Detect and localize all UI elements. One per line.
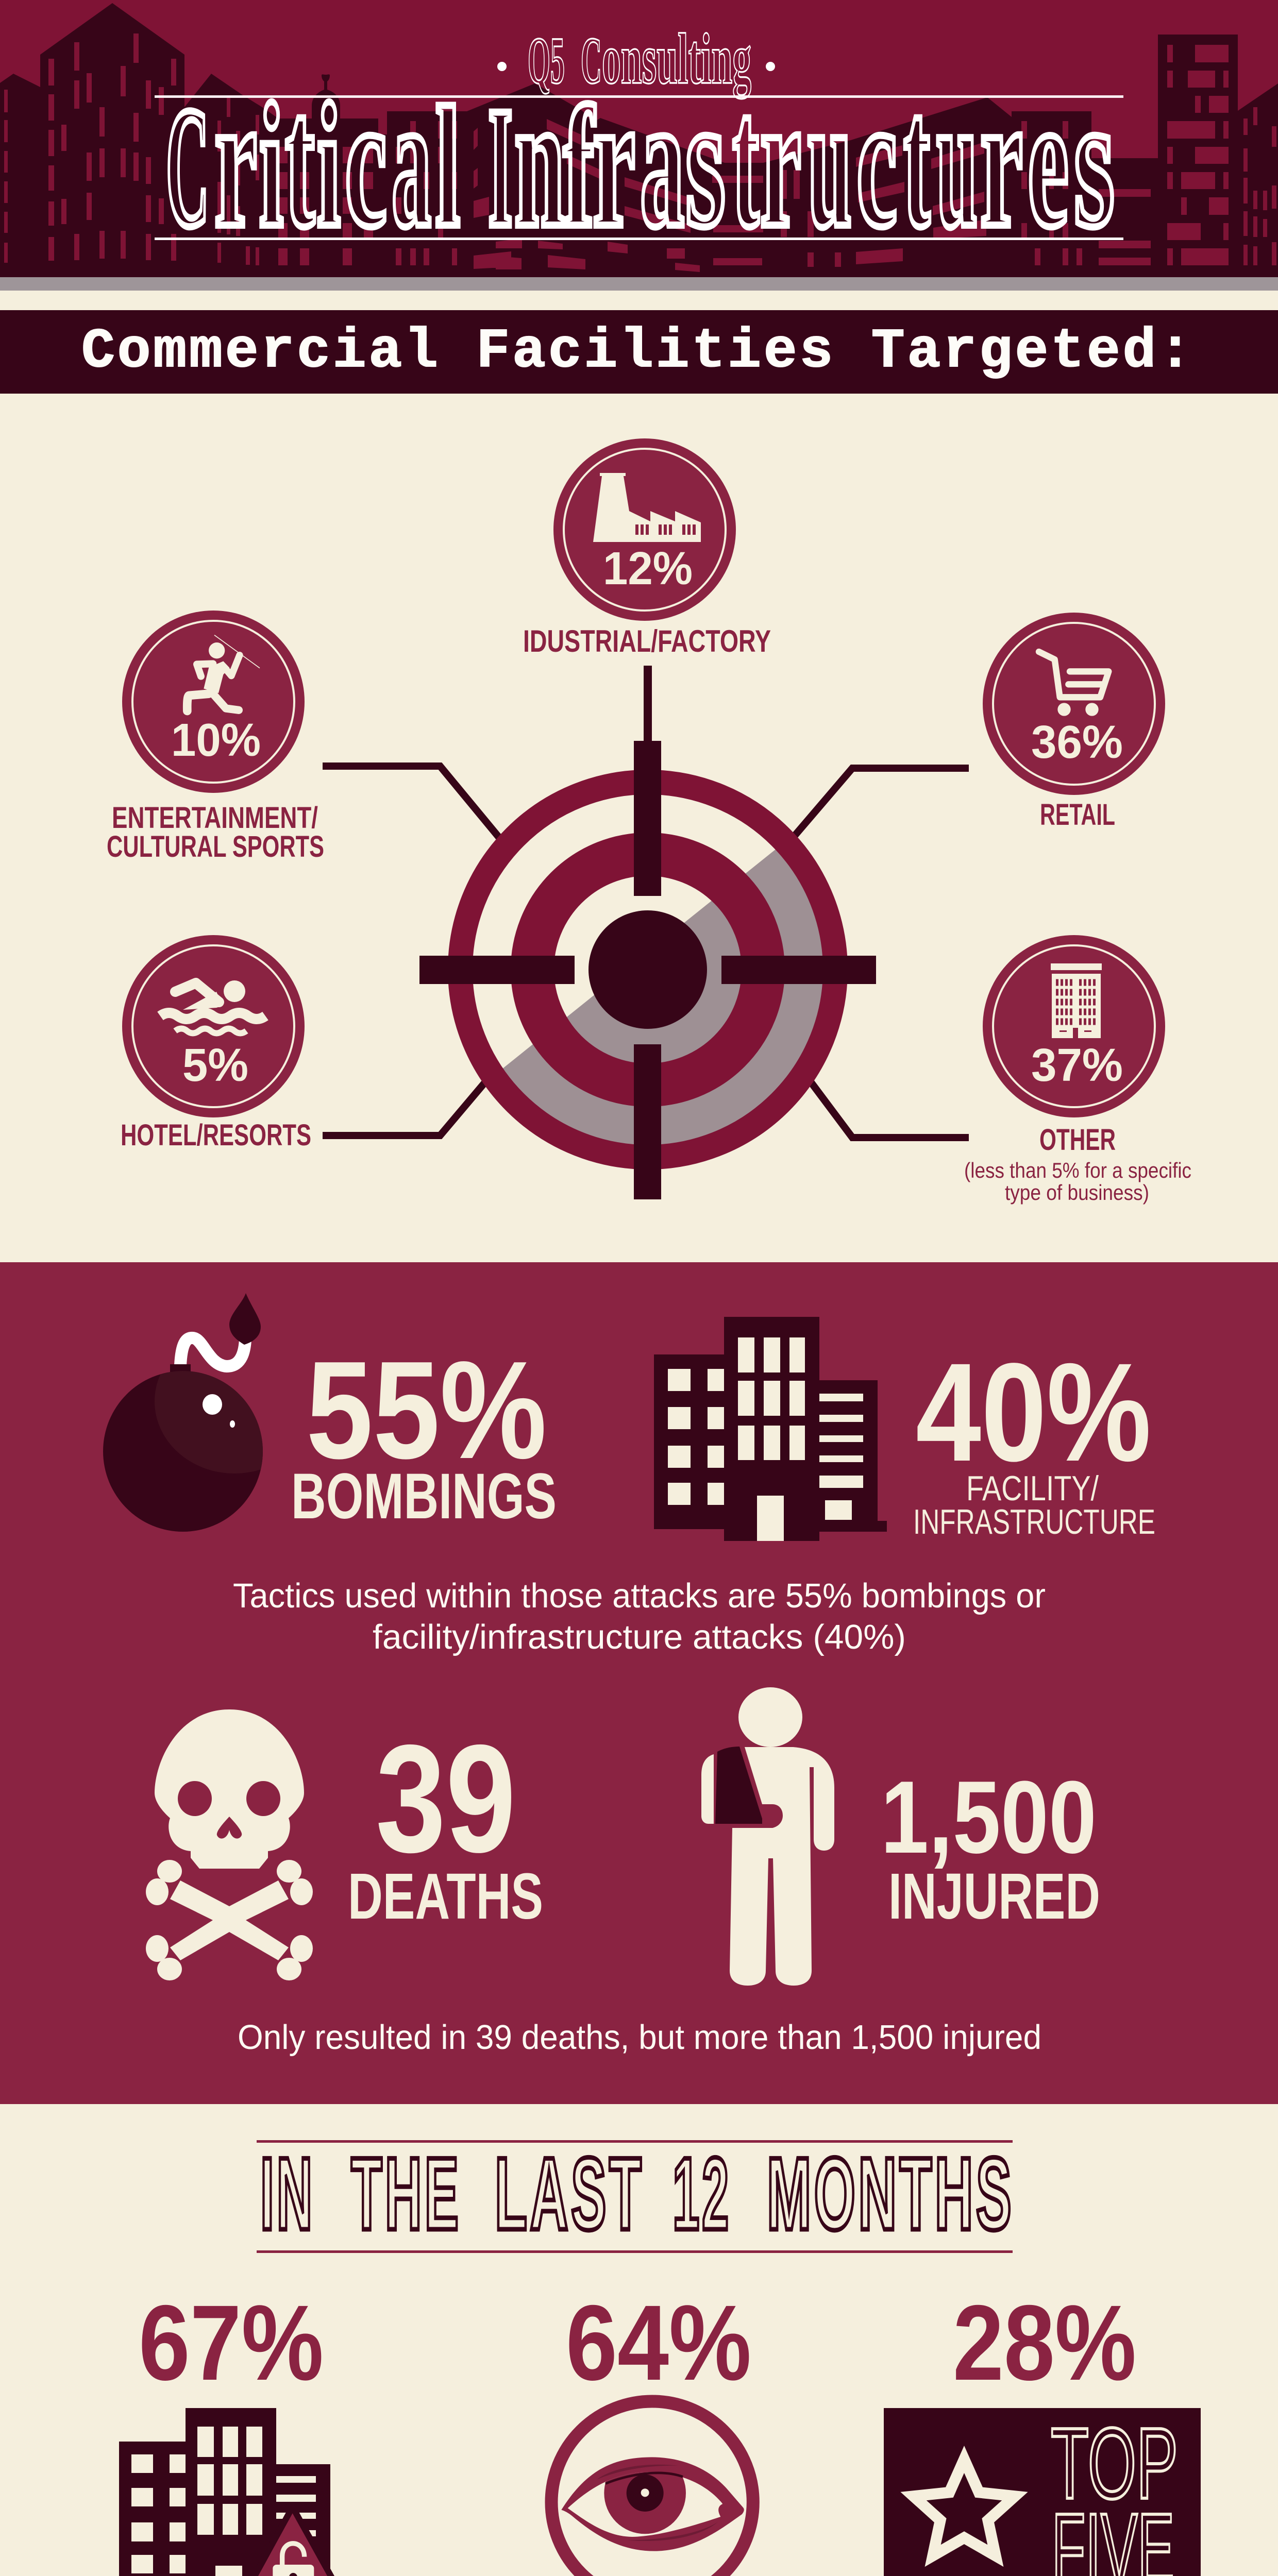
company name: onsulting	[602, 19, 751, 99]
icon: swimmer	[160, 980, 265, 1033]
bullseye	[588, 910, 707, 1029]
icon: office tower	[1051, 963, 1102, 1038]
panel: entertainment 10%	[122, 611, 305, 793]
bullet right	[766, 62, 775, 71]
city skyline illustration	[0, 3, 1278, 277]
company name: Q5	[528, 24, 565, 98]
label: industrial: IDUSTRIAL/FACTORY	[523, 624, 771, 658]
description: tactics: Tactics used within those attacks are 55% bombings or	[233, 1577, 1046, 1615]
column: 67% breach	[83, 2283, 380, 2576]
value: 5%	[182, 1040, 248, 1091]
target diagram	[323, 666, 969, 1236]
stat label: facility: FACILITY/	[966, 1469, 1099, 1508]
panel: industrial factory 12%	[553, 438, 736, 621]
grey divider band	[0, 277, 1278, 291]
icon: bomb	[103, 1293, 263, 1532]
main title: s	[1074, 56, 1115, 267]
icon: eye in circle	[551, 2401, 753, 2576]
main title: t	[732, 56, 760, 267]
stat label: injured: INJURED	[888, 1860, 1100, 1933]
header banner	[0, 0, 1278, 277]
panel: other 37%	[983, 935, 1165, 1117]
value: 37%	[1031, 1040, 1123, 1091]
stat label: bombings: BOMBINGS	[291, 1461, 557, 1532]
badge text	[1051, 2407, 1178, 2576]
main title: r	[980, 56, 1023, 267]
label: retail: RETAIL	[1040, 798, 1115, 832]
icon: star	[900, 2446, 1028, 2567]
main title: C	[166, 72, 209, 263]
main title: r	[214, 56, 257, 267]
icon: building	[654, 1317, 887, 1541]
label: entertainment	[107, 801, 324, 863]
stat: 39: 39	[376, 1713, 516, 1885]
main title: r	[593, 56, 635, 267]
label: other: OTHER	[1039, 1123, 1116, 1157]
main title: c	[345, 56, 387, 267]
connector lines	[323, 666, 969, 1138]
header rule bottom	[155, 238, 1123, 240]
label: entertainment: CULTURAL SPORTS	[107, 830, 324, 863]
main title: l	[435, 72, 460, 263]
main title: t	[903, 56, 931, 267]
main title: i	[317, 67, 341, 264]
icon: injured person	[701, 1687, 834, 1986]
badge: top five	[884, 2407, 1201, 2576]
label: other: type of business)	[1005, 1180, 1149, 1205]
label: other: (less than 5% for a specific	[964, 1158, 1191, 1182]
grey wedge	[503, 850, 822, 1144]
column: 64% anticipate	[514, 2283, 800, 2576]
stat label: facility: INFRASTRUCTURE	[913, 1502, 1155, 1541]
label: other	[964, 1123, 1191, 1205]
heading: last 12 months: 12	[672, 2137, 731, 2251]
main title: u	[936, 56, 978, 267]
main title: a	[640, 56, 684, 267]
stat: 28%	[953, 2283, 1136, 2403]
main title: a	[392, 56, 431, 267]
company name: C	[581, 24, 602, 98]
main title: i	[259, 67, 283, 264]
heading: last 12 months: MONTHS	[767, 2137, 1014, 2251]
heading text: Commercial Facilities Targeted:	[81, 320, 1192, 383]
header rule top	[155, 95, 1123, 98]
stat: 67%	[139, 2283, 324, 2403]
description: tactics: facility/infrastructure attacks (40%)	[373, 1618, 906, 1656]
main title: f	[563, 72, 595, 263]
crosshair bars	[419, 741, 876, 1199]
heading: last 12 months: LAST	[495, 2137, 644, 2251]
icon: skull and crossbones	[146, 1709, 313, 1980]
icon: athlete	[187, 635, 260, 711]
main title: r	[760, 56, 801, 267]
badge text: TOP	[1051, 2407, 1178, 2520]
icon: shopping cart	[1039, 652, 1108, 716]
main title: c	[856, 56, 897, 267]
main title: I	[488, 72, 513, 263]
label: entertainment: ENTERTAINMENT/	[112, 801, 318, 835]
section heading band	[0, 310, 1278, 394]
panel: hotel 5%	[122, 935, 305, 1117]
heading: last 12 months	[257, 2137, 1014, 2253]
main title: s	[685, 56, 726, 267]
value: 10%	[171, 715, 261, 766]
outer ring	[460, 782, 835, 1157]
main title: e	[1028, 56, 1069, 267]
stat: 1,500: 1,500	[881, 1760, 1097, 1875]
panel: retail 36%	[983, 613, 1165, 795]
heading: last 12 months: IN	[260, 2137, 315, 2251]
stat label: facility	[913, 1469, 1155, 1541]
description: tactics	[233, 1577, 1046, 1656]
value: 12%	[603, 543, 693, 595]
bullet left	[497, 62, 507, 71]
stat: 55%: 55%	[306, 1333, 547, 1488]
stat label: deaths: DEATHS	[348, 1860, 543, 1933]
icon: building with unlocked warning	[119, 2408, 344, 2576]
stat: 64%	[566, 2283, 751, 2403]
description: casualties: Only resulted in 39 deaths, but more than 1,500 injured	[238, 2018, 1041, 2057]
icon: factory	[593, 473, 701, 542]
middle ring	[532, 854, 763, 1085]
label: hotel: HOTEL/RESORTS	[121, 1118, 311, 1152]
column: 28% top five	[884, 2283, 1201, 2576]
panel: tactics and casualties	[0, 1262, 1278, 2104]
heading: last 12 months: THE	[351, 2137, 461, 2251]
stat: 40%: 40%	[916, 1334, 1151, 1490]
value: 36%	[1031, 717, 1123, 768]
main title: t	[285, 56, 316, 267]
main title: n	[514, 56, 565, 267]
main title: u	[808, 56, 852, 267]
